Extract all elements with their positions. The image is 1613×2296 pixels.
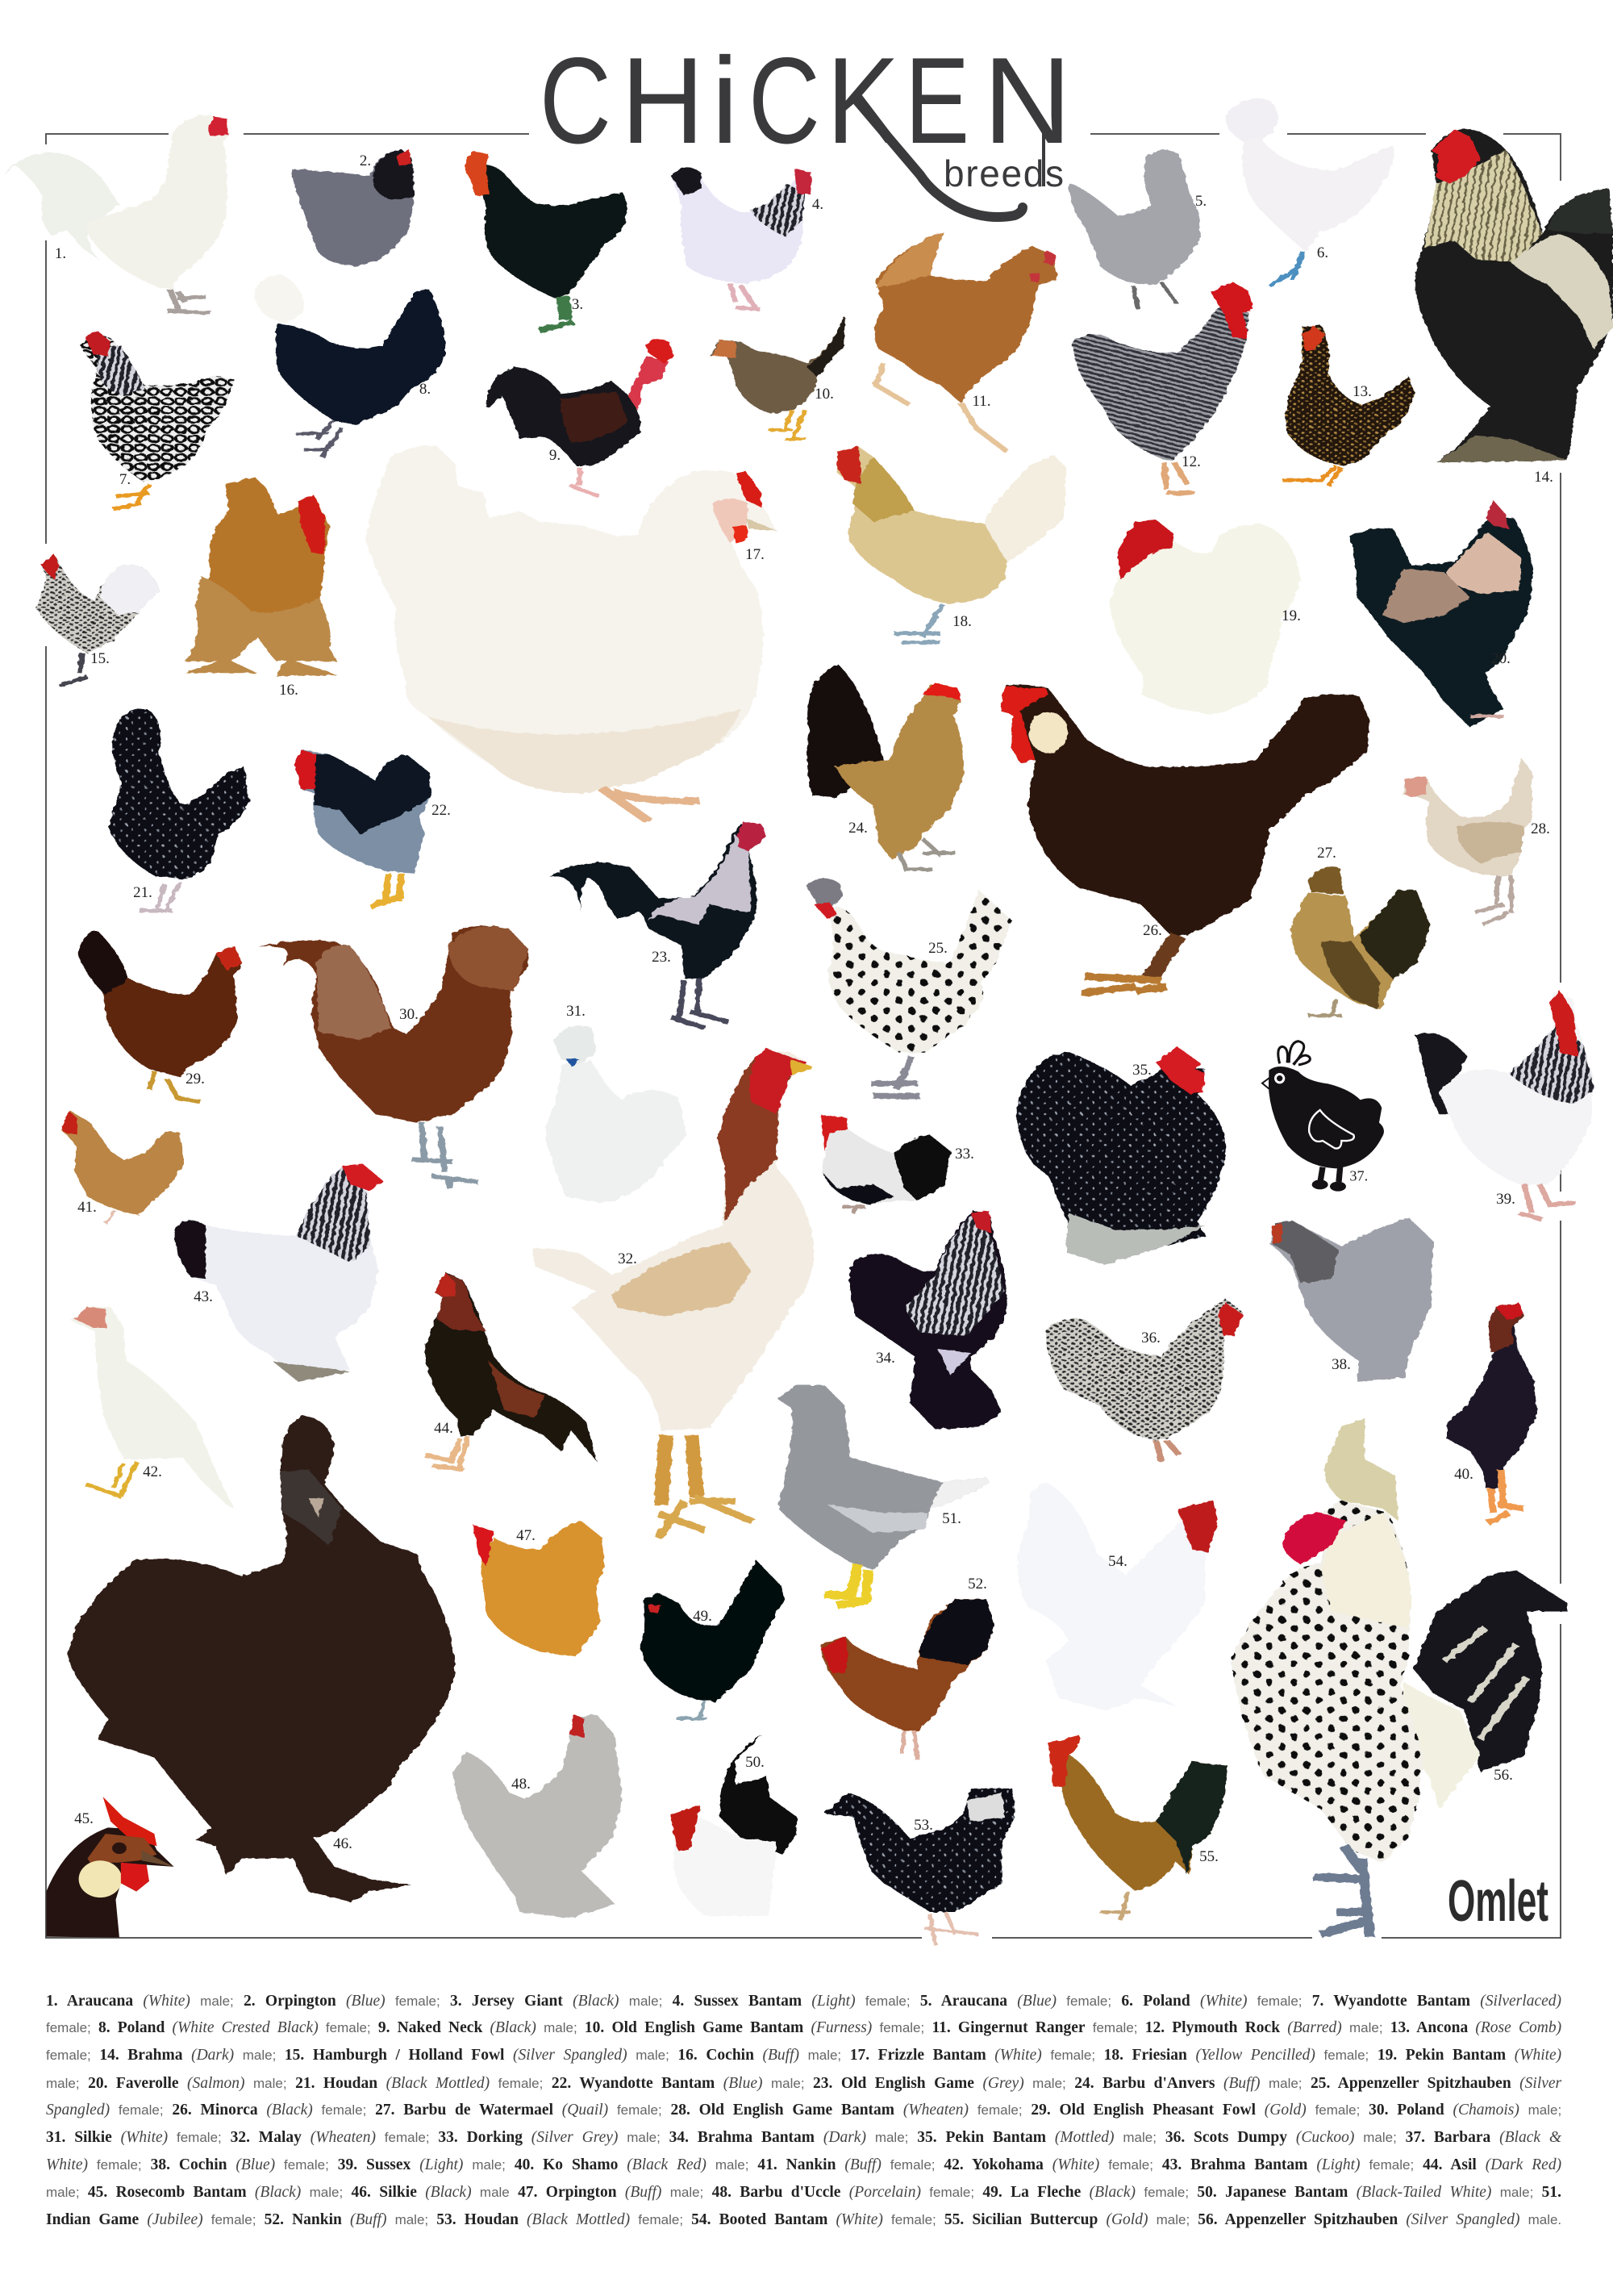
chicken 17 Frizzle Bantam [365,445,777,820]
chicken 50 Japanese Bantam [671,1735,798,1916]
chicken 30 Poland Chamois: 30. [399,1006,419,1023]
chicken 26 Minorca: 26. [1143,922,1162,939]
chicken 45 Rosecomb Bantam [46,1797,174,1938]
chicken 18 Friesian [837,446,1066,642]
chicken 51 Indian Game: 51. [942,1510,961,1527]
title: C [540,33,611,169]
chicken 7 Wyandotte Bantam: 7. [119,471,131,488]
chicken 22 Wyandotte Blue [294,750,451,907]
chicken 5 Araucana Blue: 5. [1195,193,1207,210]
chicken 25 Appenzeller [806,878,1012,1096]
chicken 22 Wyandotte Blue: 22. [431,802,451,819]
chicken 13 Ancona [1282,325,1415,486]
chicken 35 Pekin Mottled: 35. [1132,1062,1152,1079]
chicken 31 Silkie White [545,1003,686,1203]
chicken 43 Brahma Bantam Light: 43. [194,1288,213,1305]
title: C [748,33,820,169]
chicken 29 OE Pheasant Fowl: 29. [185,1071,205,1087]
chicken 39 Sussex Light [1416,991,1594,1219]
chicken 8 Poland White Crested Black [255,275,445,457]
chicken 16 Cochin Buff: 16. [279,682,298,699]
chicken 42 Yokohama [72,1307,234,1509]
chicken 12 Plymouth Rock: 12. [1182,453,1201,470]
chicken 24 Barbu d'Anvers: 24. [848,820,868,837]
chicken 9 Naked Neck [486,338,674,497]
chicken 8 Poland White Crested Black: 8. [419,381,431,398]
chicken 15 Hamburgh: 15. [90,650,110,667]
chicken 54 Booted Bantam [1017,1482,1218,1710]
chicken 25 Appenzeller: 25. [928,940,948,957]
title: E [905,33,969,169]
chicken 47 Orpington Buff [473,1521,604,1657]
chicken 31 Silkie White: 31. [566,1003,586,1020]
chicken 14 Brahma Dark [1415,129,1613,486]
chicken 21 Houdan: 21. [133,884,152,901]
chicken 48 Barbu d'Uccle: 48. [511,1776,531,1793]
legend: Spangled) female; 26. Minorca (Black) female; 27. Barbu de Watermael (Quail) female; 28. Old English Game Bantam (Wheaten) female; 29. Old English Pheasant Fowl (Gold) female; 30. Poland (Chamois) male; [46,2102,1561,2119]
chicken 56 Appenzeller male [1231,1418,1568,1937]
chicken 54 Booted Bantam: 54. [1108,1553,1127,1570]
chicken 12 Plymouth Rock [1071,282,1253,493]
legend: female; 14. Brahma (Dark) male; 15. Hamburgh / Holland Fowl (Silver Spangled) male; 16. Cochin (Buff) male; 17. Frizzle Bantam (White) female; 18. Friesian (Yellow Pencilled) female; 19. Pekin Bantam (White) [46,2047,1561,2064]
chicken 23 Old English Game Grey [550,822,766,1028]
chicken 10 OEG Bantam Furness [710,316,845,440]
chicken 48 Barbu d'Uccle [452,1714,623,1918]
chicken 6 Poland White [1226,98,1394,286]
chicken 21 Houdan [108,708,249,912]
chicken 56 Appenzeller male: 56. [1494,1767,1513,1784]
chicken 14 Brahma Dark: 14. [1534,469,1553,486]
chicken 1 Araucana White: 1. [55,245,66,262]
frame [46,134,1561,1938]
legend: White) female; 38. Cochin (Blue) female; 39. Sussex (Light) male; 40. Ko Shamo (Black Red) male; 41. Nankin (Buff) female; 42. Yokohama (White) female; 43. Brahma Bantam (Light) female; 44. Asil (Dark Red) [46,2156,1561,2173]
chicken 24 Barbu d'Anvers [807,664,964,871]
title: K [827,33,899,169]
chicken 35 Pekin Mottled [1016,1046,1226,1264]
chicken 20 Faverolle: 20. [1491,650,1511,667]
chicken 42 Yokohama: 42. [143,1463,162,1480]
chicken 29 OE Pheasant Fowl [77,931,243,1102]
chicken 4 Sussex Bantam: 4. [812,196,823,213]
chicken 10 OEG Bantam Furness: 10. [815,386,834,403]
chicken 55 Sicilian Buttercup: 55. [1199,1848,1219,1865]
chicken 2 Orpington Blue: 2. [360,152,371,169]
legend: 1. Araucana (White) male; 2. Orpington (Blue) female; 3. Jersey Giant (Black) male; 4. Sussex Bantam (Light) female; 5. Araucana (Blue) female; 6. Poland (White) female; 7. Wyandotte Bantam (Silverlaced) [46,1993,1561,2010]
chicken 40 Ko Shamo [1447,1303,1537,1523]
chicken 11 Gingernut Ranger: 11. [972,393,991,410]
chicken 46 Silkie Black: 46. [333,1835,352,1852]
legend: male; 45. Rosecomb Bantam (Black) male; 46. Silkie (Black) male 47. Orpington (Buff) male; 48. Barbu d'Uccle (Porcelain) female; 49. La Fleche (Black) female; 50. Japanese Bantam (Black-Tailed White) male; 51. [46,2184,1561,2201]
chicken 36 Scots Dumpy [1046,1299,1244,1461]
chicken 38 Cochin Blue: 38. [1332,1356,1351,1373]
chicken 37 Barbara icon [1262,1042,1384,1192]
chicken 1 Araucana White [4,115,229,313]
chicken 53 Houdan: 53. [914,1817,933,1834]
chicken 53 Houdan [824,1789,1015,1945]
chicken 13 Ancona: 13. [1353,383,1372,400]
chicken 33 Dorking: 33. [955,1146,974,1163]
chicken 52 Nankin male [821,1576,994,1760]
chicken 51 Indian Game [778,1385,989,1605]
chicken 20 Faverolle [1349,500,1533,728]
chicken 7 Wyandotte Bantam [80,331,234,509]
chicken 39 Sussex Light: 39. [1496,1191,1515,1208]
legend [46,1993,1561,2228]
chicken 17 Frizzle Bantam: 17. [745,546,765,563]
title: H [621,32,704,169]
chicken 32 Malay Wheaten: 32. [618,1250,637,1267]
chicken 45 Rosecomb Bantam: 45. [74,1810,94,1827]
chicken 30 Poland Chamois [260,926,529,1188]
chicken 34 Brahma Bantam Dark [849,1211,1007,1430]
chicken 16 Cochin Buff [185,477,337,699]
logo: Omlet: Omlet [1448,1869,1548,1934]
chicken 33 Dorking [821,1114,974,1213]
chicken 6 Poland White: 6. [1317,244,1328,261]
chicken 41 Nankin Buff: 41. [77,1199,97,1216]
chicken 19 Pekin Bantam White [1110,520,1301,715]
legend: male; 20. Faverolle (Salmon) male; 21. Houdan (Black Mottled) female; 22. Wyandotte Bantam (Blue) male; 23. Old English Game (Grey) male; 24. Barbu d'Anvers (Buff) male; 25. Appenzeller Spitzhauben (Silver [46,2075,1561,2092]
chicken 38 Cochin Blue [1269,1217,1434,1382]
chicken 15 Hamburgh [36,554,160,686]
title [540,32,1072,217]
chicken 26 Minorca [1001,685,1369,993]
chicken 2 Orpington Blue [290,149,414,266]
chicken 40 Ko Shamo: 40. [1454,1466,1473,1483]
chicken 34 Brahma Bantam Dark: 34. [876,1350,895,1367]
chicken 28 OEG Bantam Wheaten: 28. [1531,820,1550,837]
chicken 19 Pekin Bantam White: 19. [1282,607,1301,624]
chicken 55 Sicilian Buttercup [1048,1735,1228,1920]
chicken 44 Asil: 44. [434,1420,453,1437]
legend: 31. Silkie (White) female; 32. Malay (Wheaten) female; 33. Dorking (Silver Grey) male; 34. Brahma Bantam (Dark) male; 35. Pekin Bantam (Mottled) male; 36. Scots Dumpy (Cuckoo) male; 37. Barbara (Black & [46,2129,1561,2146]
legend: female; 8. Poland (White Crested Black) female; 9. Naked Neck (Black) male; 10. Old English Game Bantam (Furness) female; 11. Gingernut Ranger female; 12. Plymouth Rock (Barred) male; 13. Ancona (Rose Comb) [46,2019,1561,2036]
chicken 49 La Fleche: 49. [693,1608,712,1625]
title: i [711,32,739,169]
chicken 36 Scots Dumpy: 36. [1141,1330,1161,1346]
chicken 18 Friesian: 18. [952,613,972,630]
legend: Indian Game (Jubilee) female; 52. Nankin (Buff) male; 53. Houdan (Black Mottled) female; 54. Booted Bantam (White) female; 55. Sicilian Buttercup (Gold) male; 56. Appenzeller Spitzhauben (Silver Spangled) male. [46,2211,1561,2228]
chicken 50 Japanese Bantam: 50. [745,1754,765,1771]
chicken 4 Sussex Bantam [671,167,823,309]
chicken 44 Asil [424,1272,597,1472]
chicken 49 La Fleche [640,1560,785,1718]
title: N [983,32,1072,169]
chicken 32 Malay Wheaten [532,1049,814,1538]
chicken 3 Jersey Giant: 3. [572,296,583,313]
chicken 23 Old English Game Grey: 23. [652,949,671,966]
chicken 41 Nankin Buff [62,1110,184,1223]
chicken 47 Orpington Buff: 47. [516,1527,536,1544]
chicken 9 Naked Neck: 9. [549,447,561,464]
chicken 52 Nankin male: 52. [968,1576,987,1593]
chicken 3 Jersey Giant [465,151,627,331]
chicken 43 Brahma Bantam Light [174,1163,383,1382]
chicken 27 Barbu de Watermael [1291,845,1430,1016]
chicken 37 Barbara icon: 37. [1349,1167,1368,1183]
chicken 27 Barbu de Watermael: 27. [1317,845,1336,862]
chicken 46 Silkie Black [67,1416,455,1902]
chicken 5 Araucana Blue [1069,150,1207,309]
chicken 28 OEG Bantam Wheaten [1403,758,1550,925]
chicken 11 Gingernut Ranger [874,232,1057,452]
title: breeds [944,152,1064,194]
